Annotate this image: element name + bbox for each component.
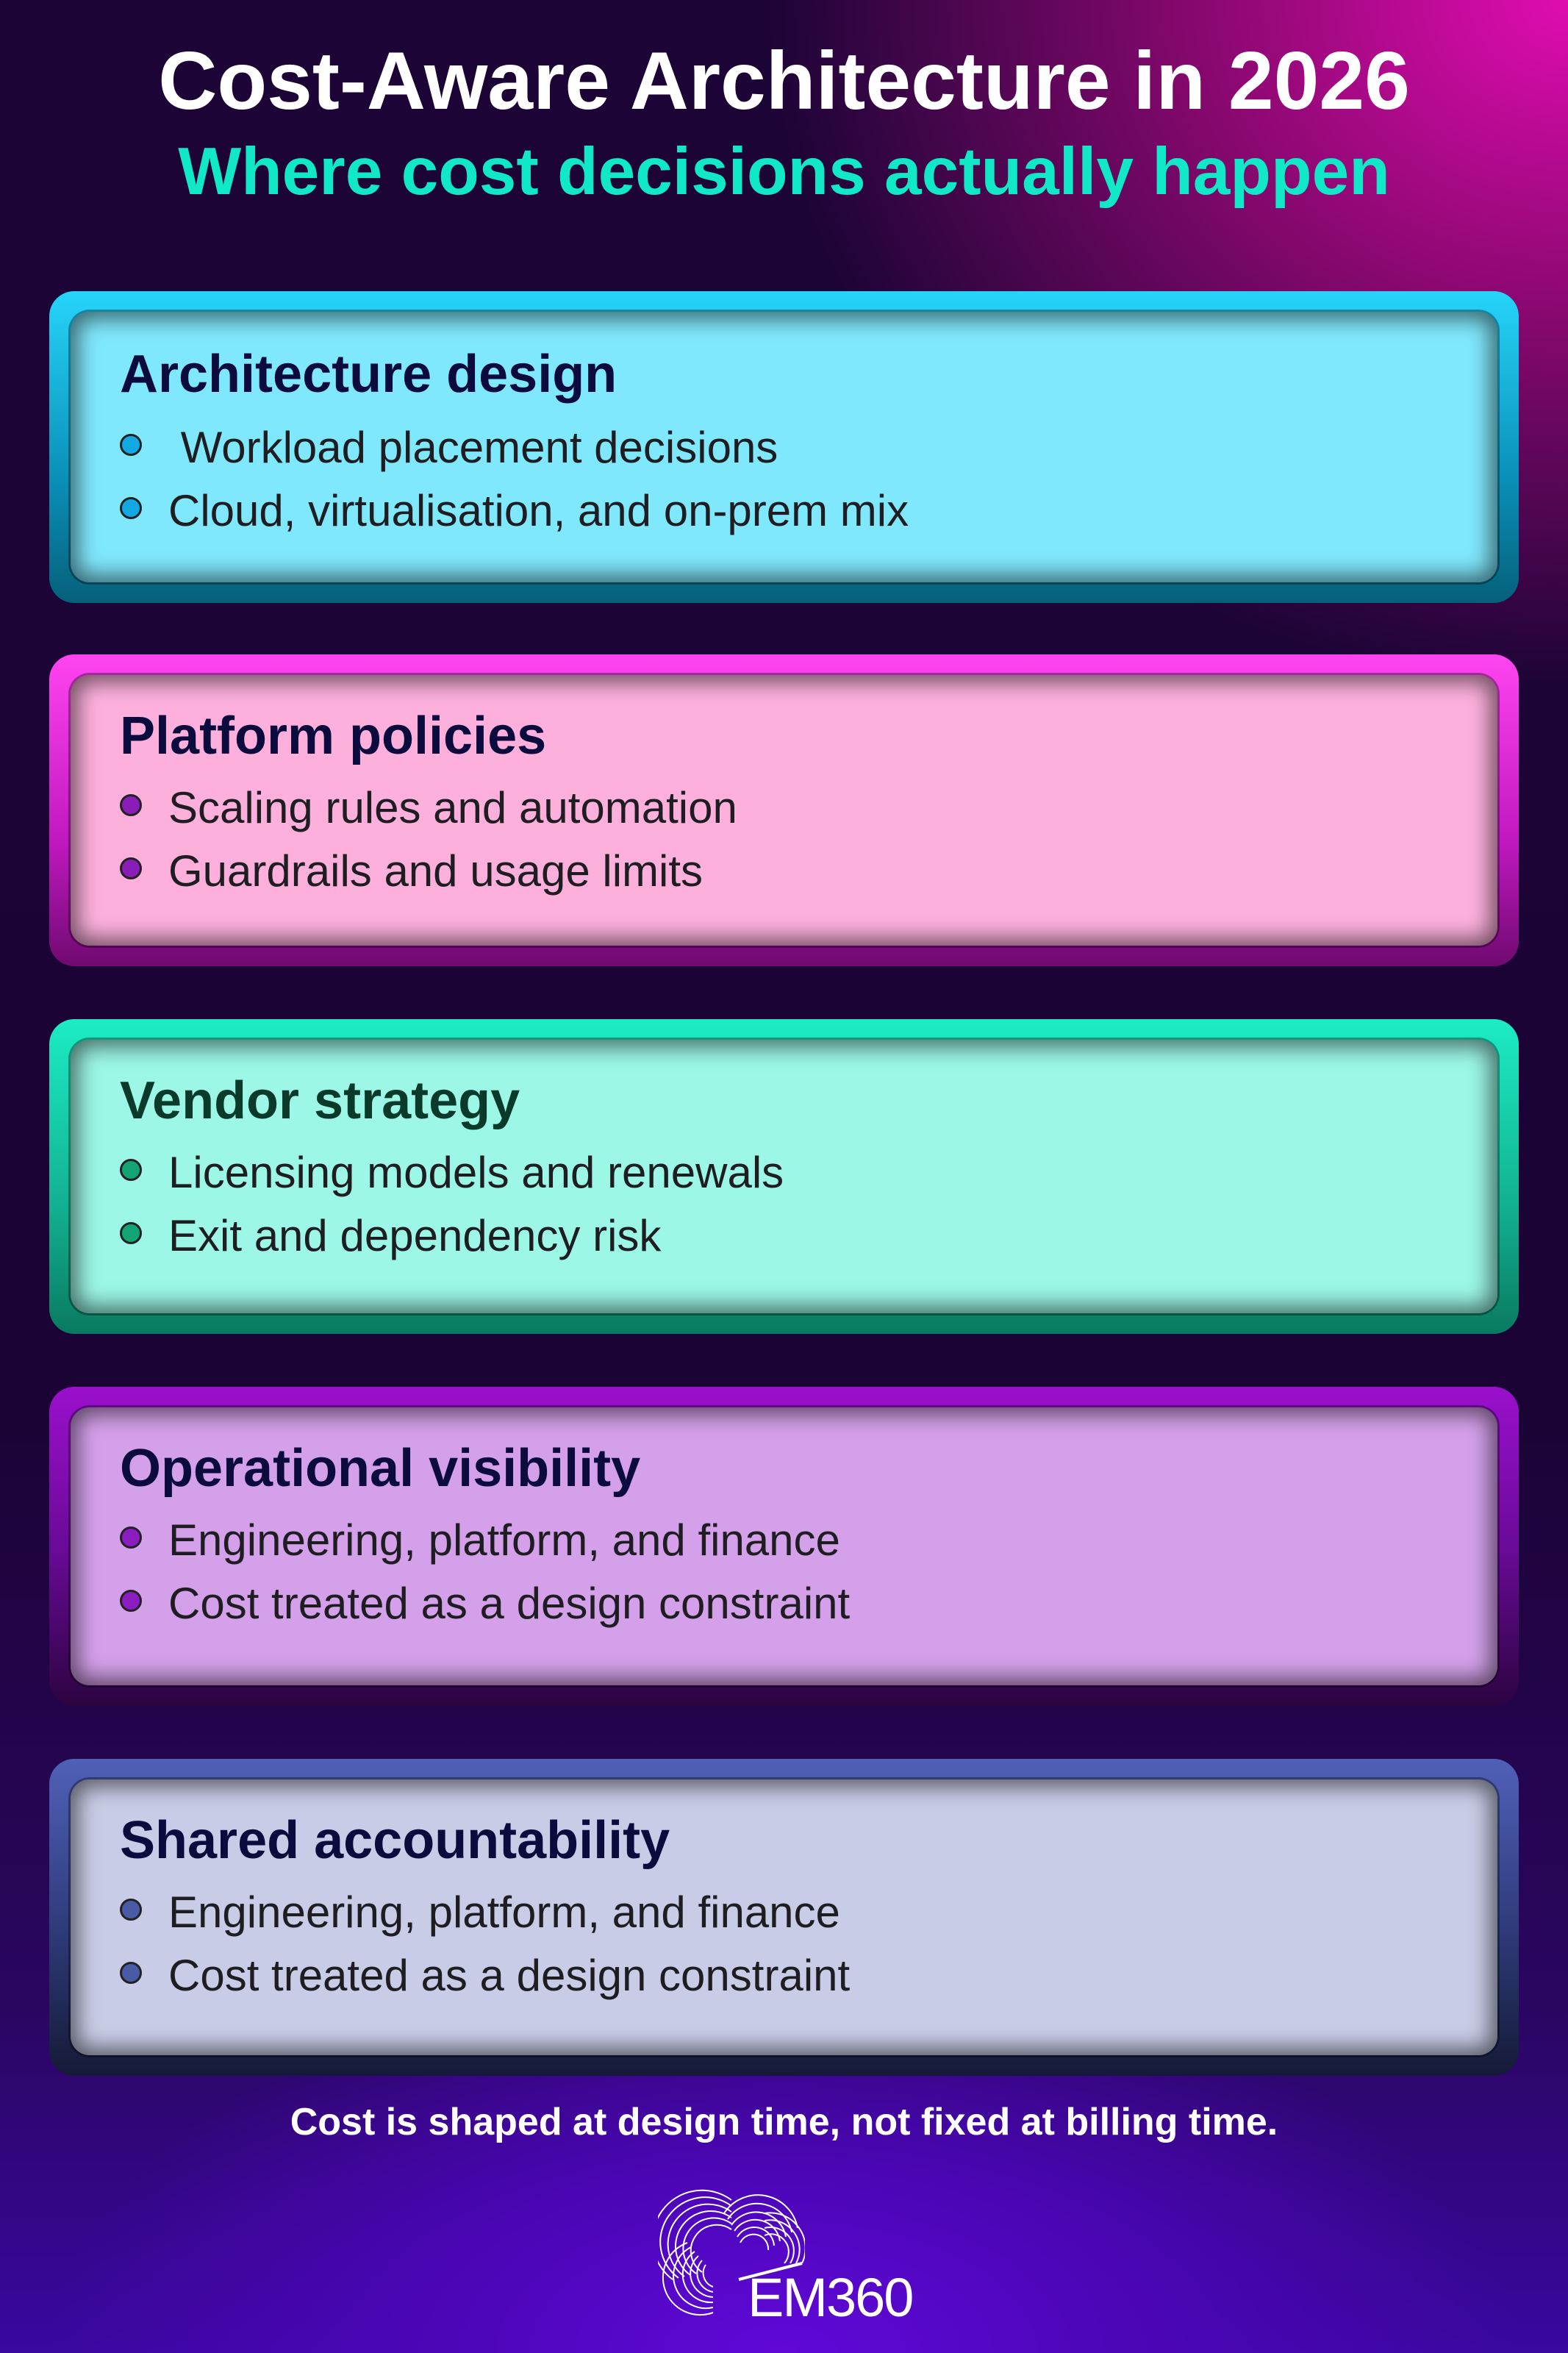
- bullet 1: Workload placement decisions: [181, 423, 778, 472]
- heading: Shared accountability: [120, 1811, 670, 1870]
- bullet 2: Exit and dependency risk: [168, 1211, 661, 1260]
- panel: platform policies: [49, 654, 1519, 966]
- panel: operational visibility: [49, 1387, 1519, 1706]
- bullet 1: Engineering, platform, and finance: [168, 1888, 840, 1937]
- heading: Operational visibility: [120, 1439, 640, 1498]
- bullet 1: Scaling rules and automation: [168, 783, 737, 832]
- title: Cost-Aware Architecture in 2026: [158, 35, 1410, 126]
- bullet 2: Cost treated as a design constraint: [168, 1579, 850, 1628]
- heading: Vendor strategy: [120, 1071, 520, 1130]
- subtitle: Where cost decisions actually happen: [178, 135, 1390, 209]
- bullet 2: Guardrails and usage limits: [168, 846, 703, 896]
- heading: Platform policies: [120, 707, 546, 765]
- bullet 1: Engineering, platform, and finance: [168, 1515, 840, 1565]
- heading: Architecture design: [120, 345, 617, 404]
- bullet 2: Cost treated as a design constraint: [168, 1951, 850, 2000]
- footer note: Cost is shaped at design time, not fixed at billing time.: [290, 2101, 1278, 2143]
- logo: EM360: [658, 2190, 912, 2328]
- logo text: EM360: [748, 2267, 912, 2328]
- icon: cloud lines: [658, 2190, 805, 2316]
- bullet 1: Licensing models and renewals: [168, 1148, 784, 1197]
- panel: shared accountability: [49, 1759, 1519, 2076]
- panel: architecture design: [49, 291, 1519, 603]
- bullet 2: Cloud, virtualisation, and on-prem mix: [168, 486, 909, 535]
- panel: vendor strategy: [49, 1019, 1519, 1334]
